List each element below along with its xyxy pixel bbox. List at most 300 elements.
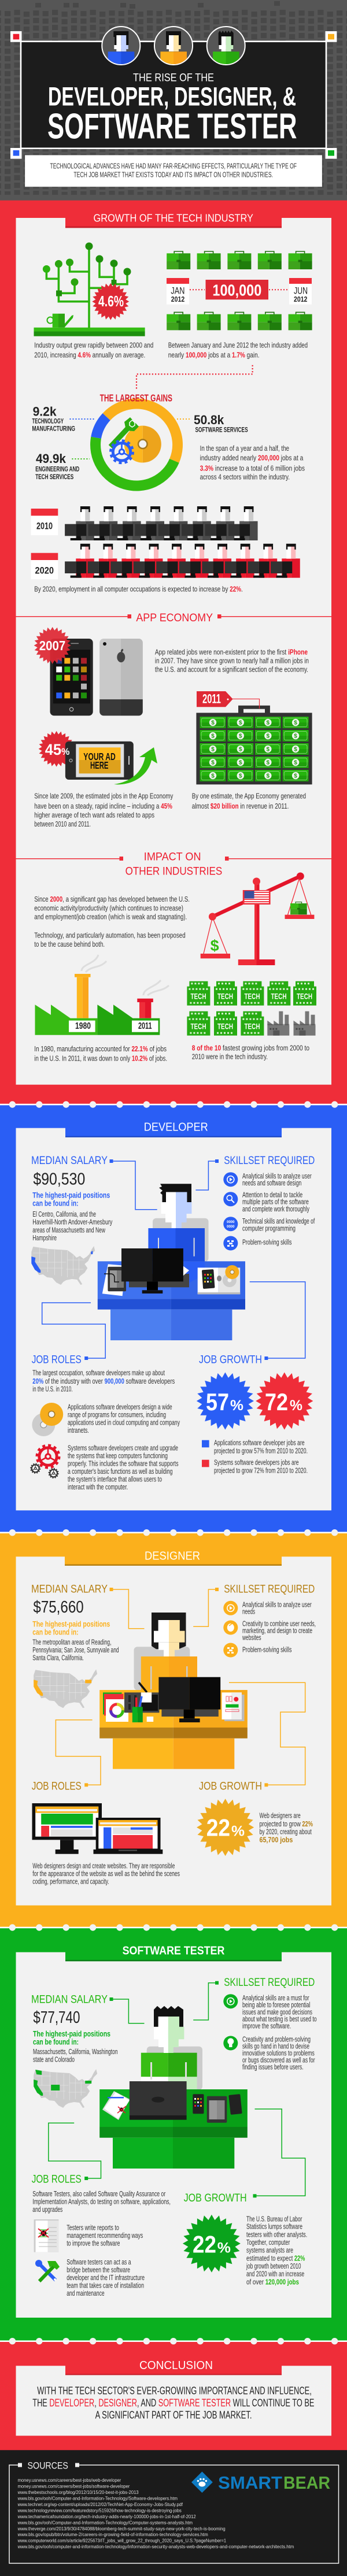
badge: 57%: 57	[206, 1388, 229, 1415]
heading: skillset required: SKILLSET REQUIRED	[224, 1584, 315, 1596]
icon: gears	[31, 1445, 59, 1478]
heading: app economy	[16, 612, 331, 624]
label: engineering and tech services	[35, 451, 90, 481]
icon: green arrow	[114, 747, 157, 784]
pictogram: tech buildings: TECH	[297, 992, 312, 1001]
heading: job growth: JOB GROWTH	[199, 1781, 262, 1793]
text: tester growth: testers with other analysts.	[246, 2230, 307, 2238]
text: highest paid: state and Colorado	[33, 2055, 75, 2063]
avatar: designer	[154, 27, 193, 65]
skill: analytical: improve the software.	[242, 2022, 291, 2030]
icon: bug report document	[34, 2219, 59, 2252]
text: highest paid	[32, 1191, 113, 1242]
icon: wrench	[110, 417, 139, 447]
text: app jobs: the U.S. and account for a significant section of the economy.	[155, 666, 308, 674]
skill: technical	[223, 1217, 315, 1232]
icon: briefcase full of money	[196, 691, 312, 784]
text: year and a half: industry added nearly 200,000 jobs at a	[200, 454, 303, 462]
heading: impact on other industries	[16, 851, 331, 877]
icon: computer	[121, 1248, 189, 1293]
heading: designer: DESIGNER	[145, 1549, 200, 1562]
legend: systems developer growth	[202, 1459, 308, 1474]
text: systems developers: interact with the computer.	[68, 1483, 128, 1491]
text: tester role: Implementation Analysts, do testing on software, applications,	[32, 2197, 171, 2206]
heading: job growth: JOB GROWTH	[199, 1354, 262, 1366]
skill: problem solving: Problem-solving skills	[242, 1645, 291, 1654]
text: designer growth: Web designers are	[259, 1812, 301, 1820]
source list: www.bls.gov/ooh/Computer-and-Information-Technology/Software-developers.htm	[17, 2496, 178, 2501]
illustration: developer at desk	[98, 1184, 245, 1340]
skill: creativity: websites	[242, 1634, 261, 1642]
text: highest paid: Santa Clara, California.	[32, 1654, 84, 1662]
dotted connector	[190, 289, 289, 290]
label: 1980	[69, 1021, 95, 1032]
icon: watering can	[47, 314, 73, 328]
text: tester bridge: bridge between the software	[67, 2266, 130, 2274]
section: conclusion	[0, 2341, 347, 2450]
label: technology manufacturing	[32, 404, 95, 432]
heading: growth of the tech industry	[65, 212, 282, 228]
text: tester reports: management recommending ways	[67, 2232, 143, 2240]
heading: software tester: SOFTWARE TESTER	[123, 1944, 225, 1958]
text: productivity gap	[34, 895, 190, 948]
legend: applications developer growth: projected to grow 57% from 2010 to 2020.	[214, 1447, 308, 1455]
text: productivity gap: to be the cause behind both.	[34, 940, 105, 948]
label: 1980: 1980	[75, 1021, 91, 1031]
legend: systems developer growth: Systems software developers jobs are	[214, 1459, 299, 1467]
icon: phone showing ad	[39, 731, 157, 784]
icon: phone back	[99, 639, 143, 716]
text: highest paid: The metropolitan areas of Reading,	[32, 1639, 111, 1647]
text: app economy revenue	[192, 792, 306, 810]
badge: 2007	[34, 627, 71, 664]
connector lines	[49, 1983, 305, 2196]
heading: developer	[65, 1120, 282, 1137]
legend: systems developer growth: projected to grow 72% from 2010 to 2020.	[214, 1466, 308, 1474]
source list: www.bls.gov/ooh/computer-and-information-technology/information-security-analysts-web-developers-and-computer-network-architects.htm	[17, 2544, 294, 2549]
badge: 2007: 2007	[39, 638, 65, 653]
donut chart: largest gains	[95, 404, 178, 485]
text: tester growth: systems analysts are	[246, 2247, 293, 2255]
heading: conclusion	[65, 2358, 282, 2375]
text: app jobs	[155, 648, 309, 674]
icon: website monitor	[32, 1803, 102, 1854]
skill: analytical	[223, 1601, 312, 1616]
icon: factory with chimneys	[35, 955, 169, 1035]
corner marker: green	[325, 148, 337, 159]
icon: phones and tablet	[193, 2094, 242, 2123]
text: year and a half: 3.3% increase to a total of 6 million jobs	[200, 464, 305, 472]
text: highest paid: Hampshire	[32, 1234, 57, 1242]
text: highest paid: The highest-paid positions	[32, 1191, 110, 1200]
text: tester growth: estimated to expect 22%	[246, 2255, 305, 2263]
section: developer	[0, 1104, 347, 1533]
text: jobs added: Between January and June 2012 the tech industry added	[168, 342, 308, 350]
text: jobs added: nearly 100,000 jobs at a 1.7% gain.	[168, 351, 259, 359]
avatar: developer	[102, 27, 140, 65]
badge: 22%: %	[217, 2240, 231, 2256]
text: applications developers: intranets.	[68, 1426, 89, 1435]
briefcases: top row	[167, 251, 312, 269]
logo: smartbear: BEAR	[283, 2473, 330, 2493]
heading: the largest gains: THE LARGEST GAINS	[100, 392, 172, 404]
skill: creativity	[223, 1619, 316, 1642]
skill: analytical: Analytical skills to analyze user	[242, 1172, 312, 1180]
icon: wrench and hammer	[35, 2260, 60, 2281]
text: largest occupation	[32, 1369, 175, 1393]
text: largest occupation: in the U.S. in 2010.	[32, 1385, 72, 1393]
label: 2011: 2011	[138, 1021, 152, 1031]
text: jobs added	[168, 342, 308, 359]
footer: sources	[0, 2450, 347, 2576]
pictogram: tech buildings: TECH	[244, 1022, 260, 1031]
text: app economy revenue: By one estimate, the App Economy generated	[192, 792, 306, 800]
skill: creativity and problem solving	[223, 2035, 315, 2071]
source list: www.bls.gov/opub/btn/volume-2/careers-in-growing-field-of-information-technology-services.htm	[17, 2532, 208, 2537]
text: applications developers: range of programs for consumers, including	[68, 1411, 166, 1419]
heading: impact on other industries: IMPACT ON	[144, 851, 201, 863]
text: systems developers: the systems that keep computers functioning	[68, 1452, 168, 1460]
illustration: tester at desk	[99, 2006, 248, 2169]
text: applications developers	[68, 1403, 180, 1435]
badge: 72%: %	[290, 1398, 302, 1414]
connector lines	[42, 1161, 305, 1358]
heading: job growth: JOB GROWTH	[184, 2192, 247, 2204]
text: tester growth	[246, 2215, 307, 2286]
heading: impact on other industries: OTHER INDUSTRIES	[125, 865, 222, 877]
text: tester growth: and 2020 with an increase	[246, 2270, 304, 2278]
text: designer growth: projected to grow 22%	[259, 1820, 313, 1828]
skill: analytical: Analytical skills are a must for	[242, 1994, 309, 2002]
label: 2011	[132, 1021, 158, 1032]
skill: creativity and problem solving: or bugs discovered as well as for	[242, 2056, 315, 2064]
text: industry output	[34, 342, 153, 359]
skill: analytical: needs and software design	[242, 1179, 301, 1187]
icon: balance scale	[201, 873, 314, 965]
skill: analytical: being able to foresee potential	[242, 2001, 310, 2009]
badge: 22%	[183, 2215, 241, 2273]
map: united states	[34, 1669, 97, 1708]
section: tech industry	[0, 201, 347, 1104]
skill: analytical: Analytical skills to analyze user	[242, 1601, 312, 1609]
text: systems developers: Systems software developers create and upgrade	[68, 1444, 178, 1452]
icon: desk items	[198, 1265, 240, 1294]
tag: 2011	[197, 691, 259, 709]
heading: median salary: MEDIAN SALARY	[31, 1584, 108, 1596]
skill: creativity and problem solving: finding issues before users.	[242, 2063, 304, 2071]
skill: creativity and problem solving: skills go hand in hand to devise	[242, 2042, 309, 2050]
text: app economy jobs	[34, 792, 174, 828]
heading: developer: DEVELOPER	[144, 1121, 208, 1134]
title text: THE RISE OF THE	[133, 72, 214, 84]
source list: www.theverge.com/2013/9/30/4784088/bloomberg-tech-summit-study-says-new-york-city-tech-is-booming	[17, 2526, 226, 2531]
text: productivity gap: and employment/job creation (which is weak and stagnating).	[34, 913, 187, 921]
heading: app economy: APP ECONOMY	[136, 612, 213, 624]
text: conclusion: THE DEVELOPER, DESIGNER, AND SOFTWARE TESTER WILL CONTINUE TO BE	[32, 2397, 314, 2409]
heading: median salary: MEDIAN SALARY	[31, 1155, 108, 1167]
icon: american flag	[243, 890, 271, 905]
text: fastest growing jobs: 8 of the 10 fastest growing jobs from 2000 to	[192, 1044, 309, 1052]
text: highest paid: The highest-paid positions	[33, 2029, 110, 2038]
corner marker: yellow	[325, 31, 337, 42]
icon: closed laptop	[130, 2081, 187, 2120]
text: tester growth: job growth between 2010	[246, 2262, 301, 2270]
text: systems developers: a computer's basic functions as well as building	[68, 1467, 172, 1476]
text: highest paid: can be found in:	[32, 1199, 78, 1208]
label: software services	[177, 413, 248, 433]
source list: www.thebestschools.org/blog/2012/10/15/20-best-it-jobs-2013	[17, 2490, 139, 2495]
calendar: 2010: 2010	[36, 521, 53, 532]
icon: computer	[158, 1677, 220, 1722]
badge: 22%	[197, 1799, 254, 1856]
icon: growth tree	[34, 243, 145, 336]
source list: money.usnews.com/careers/best-jobs/software-developer	[18, 2484, 130, 2489]
badge: 22%: 22	[193, 2231, 216, 2258]
text: systems developers	[68, 1444, 178, 1491]
title text	[47, 72, 297, 146]
skill: creativity and problem solving: Creativity and problem-solving	[242, 2035, 311, 2043]
badge: 4.6%: 4.6%	[98, 294, 124, 310]
text: highest paid: El Centro, California, and the	[32, 1210, 96, 1218]
calendar: january 2012: JAN	[171, 286, 184, 296]
calendar: june 2012	[289, 278, 312, 305]
badge: 4.6%	[92, 283, 129, 320]
text: app economy jobs: Since late 2009, the estimated jobs in the App Economy	[34, 792, 174, 800]
text: highest paid: Massachusetts, California, Washington	[33, 2048, 118, 2056]
text: year and a half: In the span of a year and a half, the	[200, 444, 289, 453]
heading: median salary: MEDIAN SALARY	[31, 1994, 108, 2006]
text: highest paid: areas of Massachusetts and New	[32, 1226, 106, 1234]
pictogram: tech buildings: TECH	[191, 992, 206, 1001]
text: tester role: Software Testers, also called Software Quality Assurance or	[32, 2190, 165, 2198]
source list: www.techamericafoundation.org/tech-industry-adds-nearly-100000-jobs-in-1st-half-of-2012	[17, 2514, 196, 2519]
text: tester growth: The U.S. Bureau of Labor	[246, 2215, 302, 2223]
heading: job roles: JOB ROLES	[32, 2174, 82, 2186]
label: software services: SOFTWARE SERVICES	[195, 427, 248, 433]
text: tester bridge: and maintenance	[67, 2289, 105, 2297]
text: manufacturing share: in the U.S. In 2011, it was down to only 10.2% of jobs.	[34, 1055, 167, 1063]
heading: sources: SOURCES	[28, 2460, 68, 2471]
briefcases: bottom row	[167, 312, 312, 330]
source list	[17, 2478, 294, 2549]
section dividers	[0, 1101, 347, 2344]
text: largest occupation: The largest occupation, software developers make up about	[32, 1369, 165, 1377]
skill: analytical	[223, 1994, 317, 2030]
icon: wireframe sheet	[222, 1692, 244, 1721]
text: tester role	[32, 2190, 171, 2214]
skill: attention to detail: and complete work thoroughly	[242, 1205, 309, 1213]
text: productivity gap: Technology, and particularly automation, has been proposed	[34, 932, 186, 940]
map: united states	[31, 1246, 95, 1285]
skill: technical: Technical skills and knowledge of	[242, 1217, 315, 1225]
skill: analytical: issues and make good decisions	[242, 2008, 312, 2016]
stat: salary: $77,740	[33, 2008, 80, 2027]
badge: 57%: %	[230, 1398, 243, 1414]
title panel	[10, 27, 337, 159]
skill: technical: 0000	[227, 1221, 235, 1224]
skill: attention to detail: multiple parts of the software	[242, 1198, 309, 1206]
section: designer	[0, 1533, 347, 1928]
icon: dollar sign: $	[211, 937, 219, 954]
text: tester reports	[67, 2223, 143, 2247]
dotted arrow to largest gains	[136, 365, 253, 389]
connector lines	[56, 1589, 305, 1785]
icon: disc	[124, 425, 161, 462]
text: designer role	[32, 1862, 180, 1885]
legend: applications developer growth	[202, 1439, 308, 1455]
text: designer growth: 65,700 jobs	[259, 1836, 293, 1844]
corner marker: blue	[10, 148, 22, 159]
calendar: 2020	[31, 553, 58, 579]
pictogram: tech buildings: TECH	[217, 1022, 233, 1031]
source list: www.bls.gov/ooh/Computer-and-Information-Technology/Computer-systems-analysts.htm	[17, 2520, 193, 2525]
calendar: january 2012: 2012	[171, 295, 184, 303]
text: fastest growing jobs: 2010 were in the tech industry.	[192, 1053, 268, 1061]
text: applications developers: applications used in cloud computing and company	[68, 1418, 180, 1426]
text: highest paid: can be found in:	[33, 2037, 79, 2046]
label: technology manufacturing: 9.2k	[33, 404, 57, 418]
text: app jobs: App related jobs were non-existent prior to the first iPhone	[155, 648, 308, 656]
section: software tester	[0, 1928, 347, 2341]
text: largest occupation: 20% of the industry with over 900,000 software developers	[32, 1377, 175, 1385]
calendar: 2020: 2020	[35, 565, 54, 576]
text: designer growth: by 2020, creating about	[259, 1828, 312, 1836]
badge: 22%: %	[231, 1823, 245, 1840]
badge: 57%	[197, 1372, 254, 1430]
text: highest paid	[33, 2029, 118, 2063]
text: year and a half	[200, 444, 305, 481]
text: highest paid: Haverhill-North Andover-Amesbury	[32, 1218, 113, 1226]
skill: technical: 0000	[227, 1225, 235, 1229]
text: manufacturing share: In 1980, manufacturing accounted for 22.1% of jobs	[34, 1045, 167, 1053]
icon: paper and tablet	[102, 1264, 126, 1296]
pictogram: tech buildings: TECH	[191, 1022, 206, 1031]
label: technology manufacturing: MANUFACTURING	[32, 425, 75, 432]
text: tester bridge: developer and the IT infrastructure	[67, 2274, 145, 2282]
skill: problem solving: Problem-solving skills	[242, 1239, 291, 1247]
label: engineering and tech services: 49.9k	[36, 451, 67, 466]
icon: briefcase on scale	[290, 902, 307, 914]
callout: 100,000: 100,000	[212, 281, 261, 299]
icon: drawing tablet and pencil cup	[124, 1682, 160, 1722]
logo: smartbear	[191, 2471, 330, 2493]
pictogram: tech buildings: TECH	[217, 992, 233, 1001]
text: tester bridge: Software testers can act as a	[67, 2258, 131, 2266]
text: manufacturing share	[34, 1045, 167, 1063]
text: productivity gap: Since 2000, a significant gap has developed between the U.S.	[34, 895, 190, 903]
calendar: 2010	[31, 509, 58, 535]
text: designer role: for the appearance of the website as well as the behind the scenes	[32, 1870, 180, 1878]
text: highest paid	[32, 1619, 119, 1662]
text: tester reports: to improve the software	[67, 2239, 120, 2247]
text: app economy revenue: almost $20 billion in revenue in 2011.	[192, 802, 289, 810]
text: tester growth: Together, computer	[246, 2238, 290, 2247]
text: tester growth: Statistics lumps software	[246, 2223, 302, 2231]
text: highest paid: can be found in:	[32, 1627, 78, 1636]
badge: 22%: 22	[206, 1814, 230, 1841]
heading: job roles: JOB ROLES	[32, 1354, 82, 1366]
text: highest paid: The highest-paid positions	[32, 1619, 110, 1628]
pictogram: tech buildings	[187, 981, 316, 1036]
icon: discs	[32, 1403, 63, 1436]
label: engineering and tech services: TECH SERVICES	[35, 474, 73, 481]
source list: www.technet.org/wp-content/uploads/2012/02/TechNet-App-Economy-Jobs-Study.pdf	[17, 2502, 183, 2507]
skill: creativity and problem solving: innovative solutions to problems	[242, 2049, 315, 2057]
skill: creativity: marketing, and design to create	[242, 1626, 312, 1634]
intro text box	[25, 155, 322, 187]
illustration: designer at desk	[99, 1613, 248, 1769]
source list: money.usnews.com/careers/best-jobs/web-developer	[18, 2478, 121, 2483]
text: tester bridge: team that takes care of installation	[67, 2281, 144, 2289]
pictogram: workers in 2020	[65, 544, 300, 578]
tag: 2011: 2011	[202, 692, 221, 706]
label: software services: 50.8k	[194, 413, 224, 427]
text: app economy jobs: between 2010 and 2011.	[34, 820, 91, 828]
badge: 72%	[256, 1372, 313, 1430]
text: conclusion: A SIGNIFICANT PART OF THE JOB MARKET.	[95, 2409, 252, 2421]
pictogram: tech buildings: TECH	[271, 992, 287, 1001]
heading: skillset required: SKILLSET REQUIRED	[224, 1155, 315, 1167]
text: systems developers: properly. This includes the software that supports	[68, 1459, 178, 1467]
text: designer role: Web designers design and create websites. They are responsible	[32, 1862, 175, 1870]
heading: job roles: JOB ROLES	[32, 1781, 82, 1793]
text: tester bridge	[67, 2258, 145, 2297]
stat: salary: $90,530	[33, 1170, 85, 1188]
text: employment by 2020: By 2020, employment in all computer occupations is expected to increase by 22%.	[34, 585, 243, 593]
icon: gear	[111, 441, 133, 463]
stat: salary: $75,660	[33, 1598, 84, 1617]
text: tester reports: Testers write reports to	[67, 2223, 119, 2232]
pictogram: workers in 2010	[65, 506, 258, 540]
text: systems developers: the system's interface that allows users to	[68, 1476, 162, 1484]
heading: designer	[65, 1549, 282, 1566]
text: year and a half: across 4 sectors within the industry.	[200, 473, 290, 481]
corner marker: red	[10, 31, 22, 42]
text: tester role: and upgrades	[32, 2206, 62, 2214]
text: conclusion	[32, 2385, 314, 2421]
text: productivity gap: economic activity/productivity (which continues to increase)	[34, 905, 183, 913]
badge text: 45%: 45%	[45, 741, 69, 758]
map: united states	[34, 2069, 97, 2108]
text: highest paid: Pennsylvania; San Jose, Sunnyvale and	[32, 1646, 119, 1654]
source list: www.technologyreview.com/featuredstory/515926/how-technology-is-destroying-jobs	[17, 2508, 182, 2513]
skill: analytical: needs	[242, 1608, 255, 1616]
skill: problem solving	[223, 1643, 291, 1658]
calendar: june 2012: JUN	[294, 286, 308, 296]
skill: analytical	[223, 1172, 312, 1187]
icon: phone showing ad: HERE	[90, 759, 109, 771]
heading: conclusion: CONCLUSION	[139, 2359, 213, 2372]
text: tester growth: of over 120,000 jobs	[246, 2278, 299, 2286]
icon: phone front	[50, 639, 93, 716]
calendar: june 2012: 2012	[294, 295, 307, 303]
skill: attention to detail	[223, 1191, 309, 1213]
icon: bug report paper	[102, 2091, 130, 2120]
legend: applications developer growth: Applications software developer jobs are	[214, 1439, 305, 1447]
icon: colour swatches	[103, 1692, 128, 1722]
heading: growth of the tech industry: GROWTH OF THE TECH INDUSTRY	[94, 212, 253, 224]
text: applications developers: Applications software developers design a wide	[68, 1403, 172, 1411]
calendar: january 2012	[167, 278, 189, 305]
skill: attention to detail: Attention to detail to tackle	[242, 1191, 302, 1199]
text: designer role: coding, performance, and capacity.	[32, 1877, 109, 1885]
header background	[0, 0, 347, 201]
skill: problem solving	[223, 1236, 291, 1251]
text: designer growth	[259, 1812, 313, 1844]
heading: skillset required: SKILLSET REQUIRED	[224, 1977, 315, 1989]
label: technology manufacturing: TECHNOLOGY	[32, 418, 64, 425]
icon: phone showing ad: YOUR AD	[83, 751, 116, 762]
